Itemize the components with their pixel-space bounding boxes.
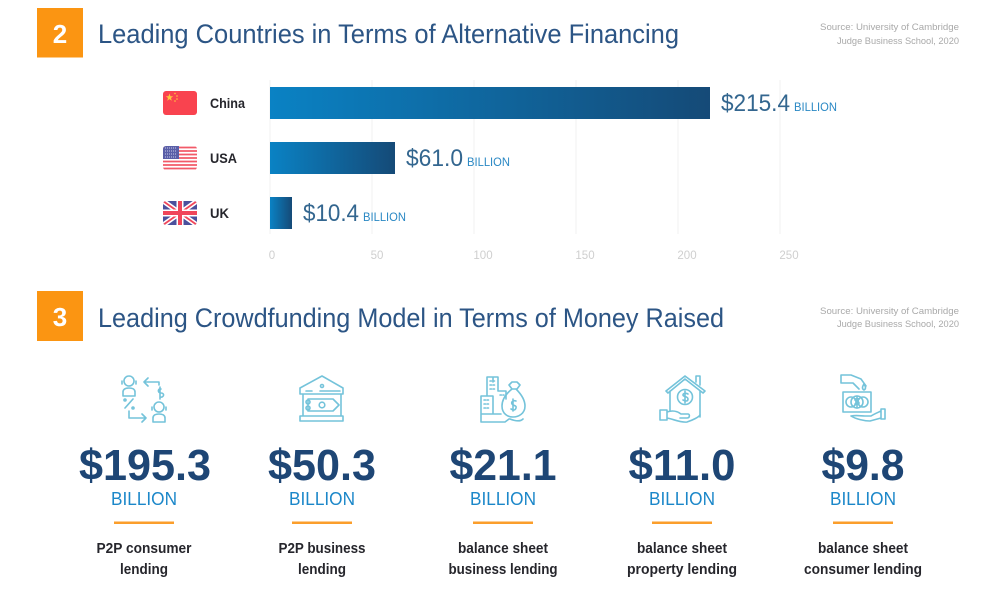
flag: China — [163, 91, 197, 115]
unit: BILLION — [470, 489, 536, 509]
label: consumer lending — [804, 562, 922, 578]
section 2 source — [820, 22, 959, 47]
label: lending — [298, 562, 346, 578]
icon: house on hand — [660, 376, 705, 422]
bar: USA: BILLION — [467, 157, 510, 169]
unit: BILLION — [649, 489, 715, 509]
section 3 badge: 3 — [53, 302, 67, 332]
panel: P2P consumer lending — [79, 376, 211, 578]
section 2 source: Source: University of Cambridge — [820, 22, 959, 33]
panel: balance sheet business lending — [448, 377, 558, 578]
section 2 source: Judge Business School, 2020 — [837, 36, 959, 47]
label — [804, 541, 922, 578]
panel: balance sheet consumer lending — [804, 375, 922, 578]
bar: UK: $10.4 — [303, 200, 359, 227]
bar: China — [270, 87, 837, 119]
label: lending — [120, 562, 168, 578]
flag: UK — [163, 201, 197, 225]
section 2 badge — [37, 8, 83, 58]
amount: $9.8 — [822, 441, 904, 490]
unit: BILLION — [830, 489, 896, 509]
label: property lending — [627, 562, 737, 578]
amount: $195.3 — [79, 441, 211, 490]
label: balance sheet — [818, 541, 908, 557]
section 3 source: Source: University of Cambridge — [820, 306, 959, 317]
rule — [652, 522, 712, 524]
bar: USA: $61.0 — [406, 145, 463, 172]
label: UK: UK — [210, 205, 229, 221]
label: P2P business — [278, 541, 366, 557]
rule — [833, 522, 893, 524]
label — [448, 541, 558, 578]
icon: buildings and money bag — [481, 377, 525, 422]
rule — [292, 522, 352, 524]
amount: $11.0 — [628, 441, 736, 490]
amount: $50.3 — [268, 441, 376, 490]
axis labels: 0 — [269, 250, 275, 262]
panel: P2P business lending — [268, 376, 376, 578]
bar: China: $215.4 — [721, 90, 790, 117]
axis labels: 250 — [779, 250, 799, 262]
bar: UK: BILLION — [363, 212, 406, 224]
label: balance sheet — [458, 541, 548, 557]
label: business lending — [448, 562, 558, 578]
rule — [473, 522, 533, 524]
label — [278, 541, 366, 578]
section 3 badge — [37, 291, 83, 341]
icon: people exchange — [122, 376, 166, 422]
bar: UK — [270, 197, 406, 229]
unit: BILLION — [111, 489, 177, 509]
amount: $21.1 — [450, 441, 556, 490]
axis labels: 50 — [371, 250, 383, 262]
axis labels: 100 — [473, 250, 493, 262]
label: China: China — [210, 95, 245, 111]
unit: BILLION — [289, 489, 355, 509]
axis labels: 200 — [677, 250, 697, 262]
panel: balance sheet property lending — [627, 376, 737, 578]
axis labels: 150 — [575, 250, 595, 262]
section 3 source — [820, 306, 959, 330]
icon: bank with banknote — [300, 376, 343, 421]
section 3 source: Judge Business School, 2020 — [837, 319, 959, 330]
label: balance sheet — [637, 541, 727, 557]
section 3 heading: Leading Crowdfunding Model in Terms of Money Raised — [98, 303, 724, 333]
section 2 heading: Leading Countries in Terms of Alternative Financing — [98, 19, 679, 49]
label — [627, 541, 737, 578]
label — [96, 541, 192, 578]
bar: China: BILLION — [794, 102, 837, 114]
section 2 badge: 2 — [53, 19, 67, 49]
rule — [114, 522, 174, 524]
icon: hands exchanging cash — [841, 375, 885, 421]
bar: USA — [270, 142, 510, 174]
label: USA: USA — [210, 150, 237, 166]
label: P2P consumer — [96, 541, 192, 557]
axis labels — [269, 250, 799, 262]
flag: USA — [163, 146, 197, 170]
bar chart: leading countries — [269, 80, 837, 262]
